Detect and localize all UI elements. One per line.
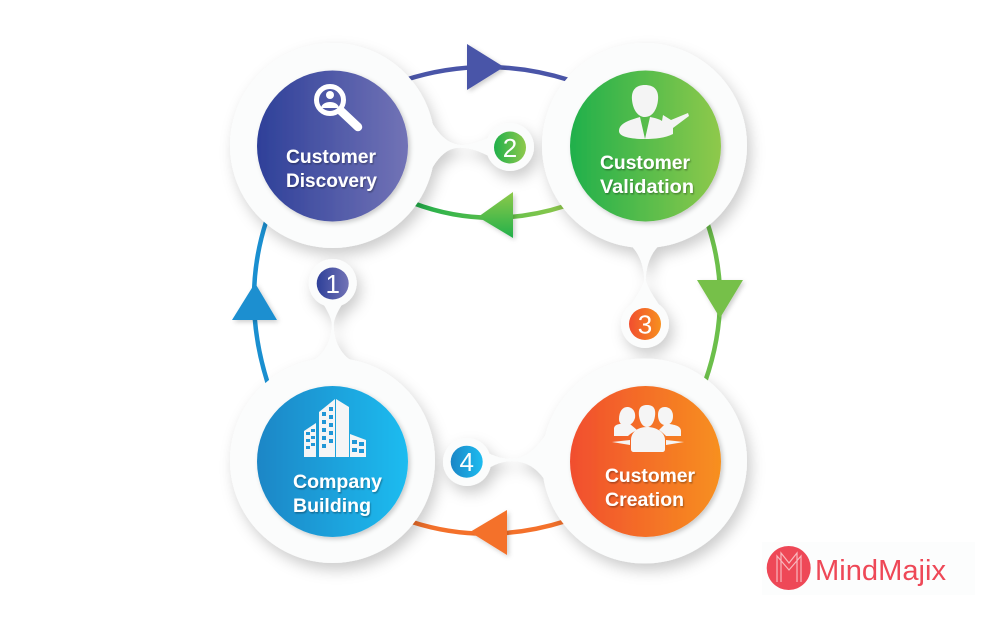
icon: logo mark: [767, 546, 811, 590]
heading: customer validation: Validation: [600, 177, 694, 198]
panel: company building: [257, 386, 408, 537]
panel: plates and connectors: [230, 43, 747, 564]
heading: customer creation: Customer: [605, 466, 696, 487]
arc: middle, validation to discovery: [413, 192, 565, 238]
heading: company building: [293, 472, 382, 517]
badge: 1: [317, 268, 349, 300]
badge: 2: [494, 132, 526, 164]
logo: mindmajix: [762, 542, 975, 595]
arc: right, validation to creation: [697, 222, 743, 382]
icon: magnifier with person: [316, 86, 358, 127]
arc: top, discovery to validation: [405, 44, 569, 90]
badge: 3: [629, 308, 661, 340]
heading: customer creation: [605, 466, 696, 511]
badge: 4: 4: [459, 447, 474, 477]
arc: bottom, creation to building: [412, 510, 566, 555]
heading: customer validation: Customer: [600, 153, 691, 174]
arrow: left: [232, 283, 277, 320]
logo text: MindMajix: [815, 555, 946, 587]
icon: team: [612, 405, 684, 452]
icon: businessman: [619, 85, 689, 139]
panel: customer discovery: [257, 70, 408, 222]
panel: customer creation: [570, 386, 721, 537]
arrow: middle: [478, 192, 513, 238]
heading: company building: Building: [293, 496, 371, 517]
heading: company building: Company: [293, 472, 382, 493]
panel: customer validation: [570, 70, 721, 222]
arrow: top: [467, 44, 504, 90]
arrow: bottom: [470, 510, 507, 555]
heading: customer discovery: [286, 147, 377, 192]
heading: customer discovery: Discovery: [286, 171, 377, 192]
badge: 1: 1: [325, 269, 340, 299]
icon: buildings: [304, 399, 366, 457]
heading: customer validation: [600, 153, 694, 198]
heading: customer discovery: Customer: [286, 147, 377, 168]
badge: 3: 3: [638, 310, 652, 340]
heading: customer creation: Creation: [605, 490, 684, 511]
badge: 2: 2: [503, 133, 517, 163]
badge: 4: [451, 446, 483, 478]
arc: left, building to discovery: [232, 222, 277, 384]
arrow: right: [697, 280, 743, 318]
